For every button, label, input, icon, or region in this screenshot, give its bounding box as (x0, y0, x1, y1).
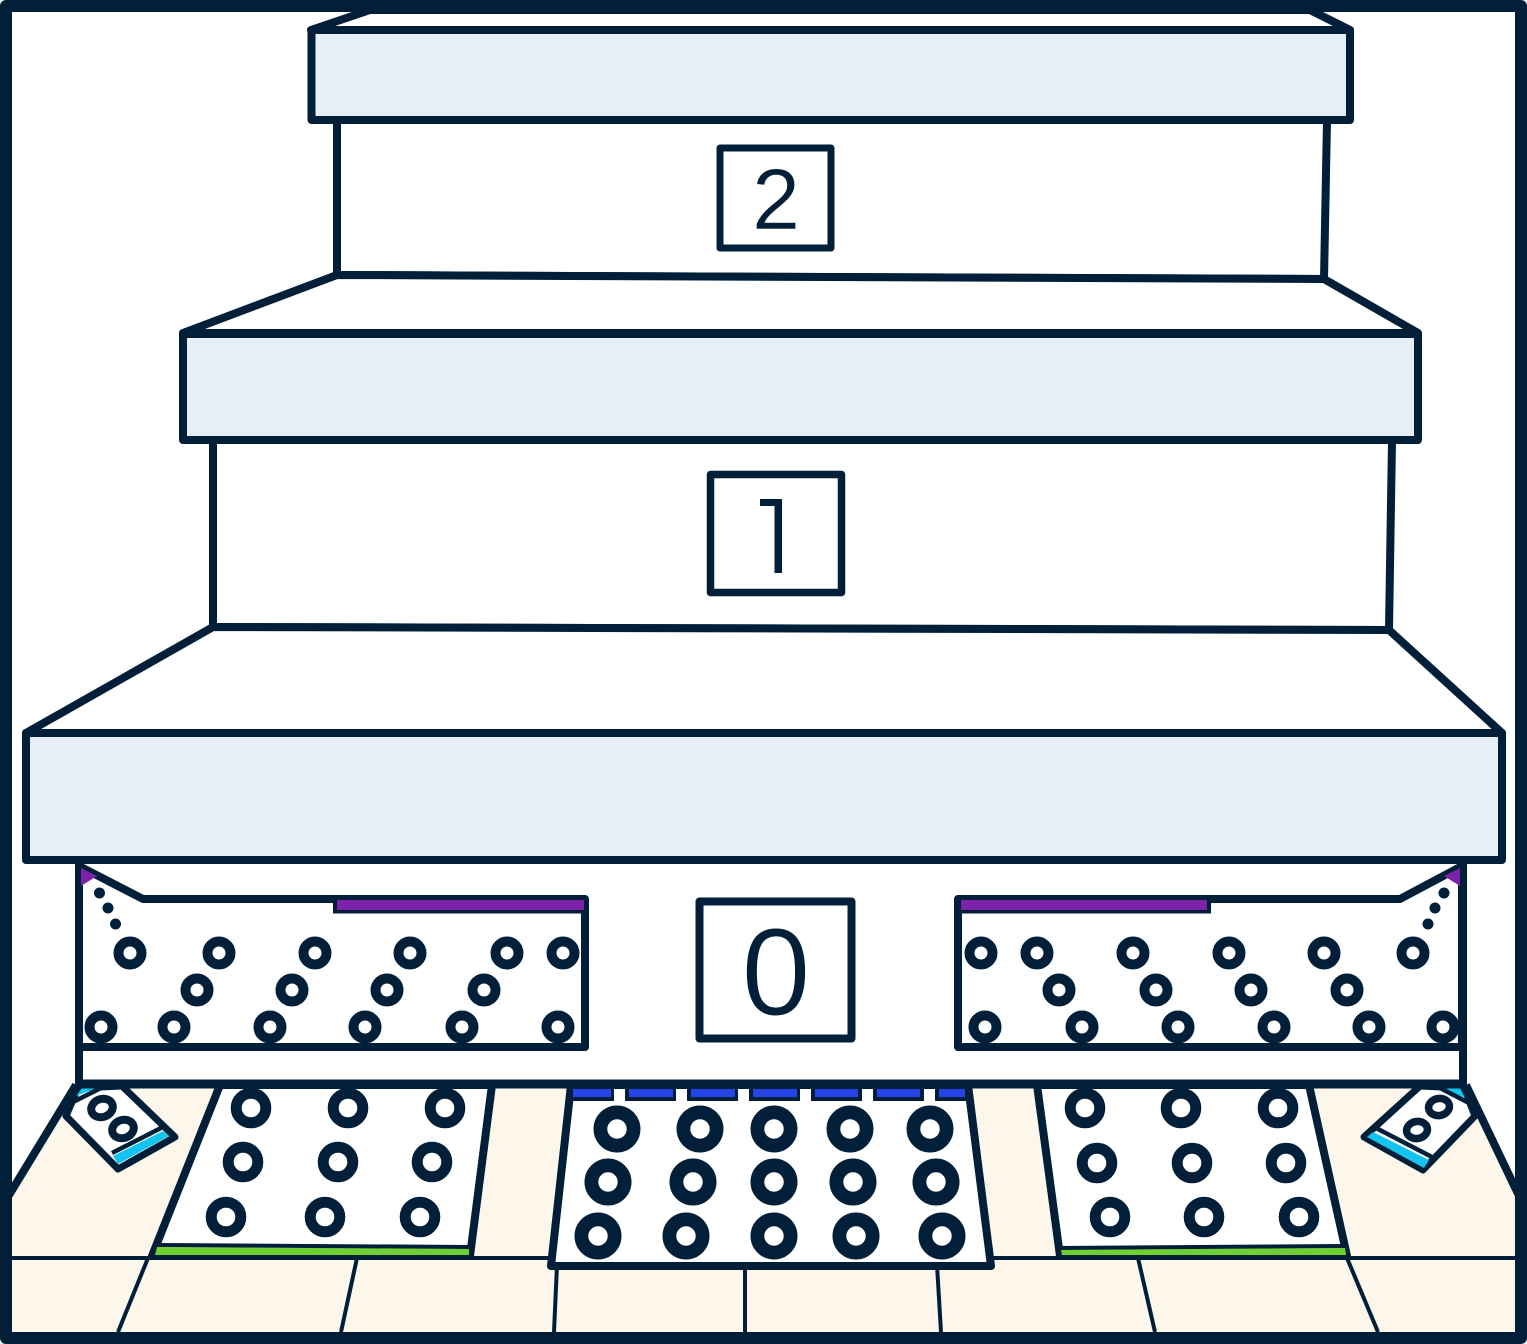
tactile mat: left (152, 1085, 492, 1256)
tactile mat: far right small (1364, 1086, 1475, 1170)
step 1 riser (213, 440, 1392, 630)
tactile mat: centre (551, 1085, 991, 1266)
step number 1 (710, 474, 842, 594)
step number 2: 2 (752, 152, 800, 248)
tactile mat: far left small (66, 1086, 175, 1169)
step number 1: 1 (750, 482, 806, 594)
floor (6, 1085, 1521, 1332)
tactile mat: right (1037, 1085, 1347, 1256)
step number 0: 0 (742, 904, 810, 1042)
step 2 tread and nosing (311, 10, 1350, 120)
step number 2 (720, 148, 831, 248)
tactile panel: riser left (79, 866, 585, 1047)
step 1 tread and nosing (183, 275, 1418, 440)
step number 0 (700, 902, 852, 1042)
tactile panel: riser right (958, 866, 1462, 1047)
step 0 riser (76, 860, 1466, 1084)
step 2 riser (337, 120, 1327, 279)
step 0 tread and nosing (26, 627, 1502, 860)
